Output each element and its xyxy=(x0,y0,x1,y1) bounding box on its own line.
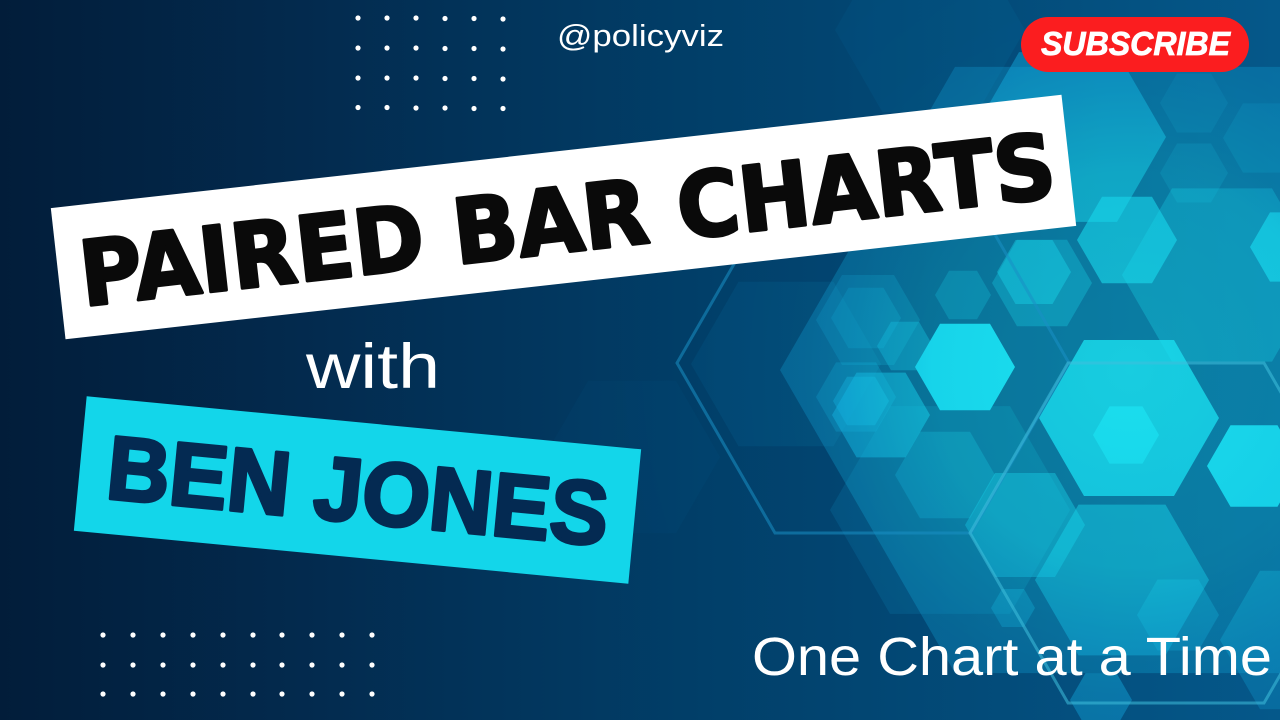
name text: BEN JONES xyxy=(103,418,613,566)
subscribe button xyxy=(1021,17,1249,72)
button label: SUBSCRIBE xyxy=(1041,25,1231,62)
dot grid: top xyxy=(355,15,506,111)
name background xyxy=(74,396,641,584)
hexagon outlines xyxy=(677,193,1280,703)
button pill xyxy=(1021,17,1249,72)
title banner xyxy=(51,95,1076,339)
hexagon pattern xyxy=(692,52,1280,720)
banner background xyxy=(51,95,1076,339)
tagline: One Chart at a Time xyxy=(752,627,1272,687)
title text: PAIRED BAR CHARTS xyxy=(74,114,1061,328)
dot grid: bottom xyxy=(100,632,375,697)
handle: @policyviz: @policyviz xyxy=(557,18,724,53)
name banner xyxy=(74,396,641,584)
with label: with xyxy=(305,332,440,402)
